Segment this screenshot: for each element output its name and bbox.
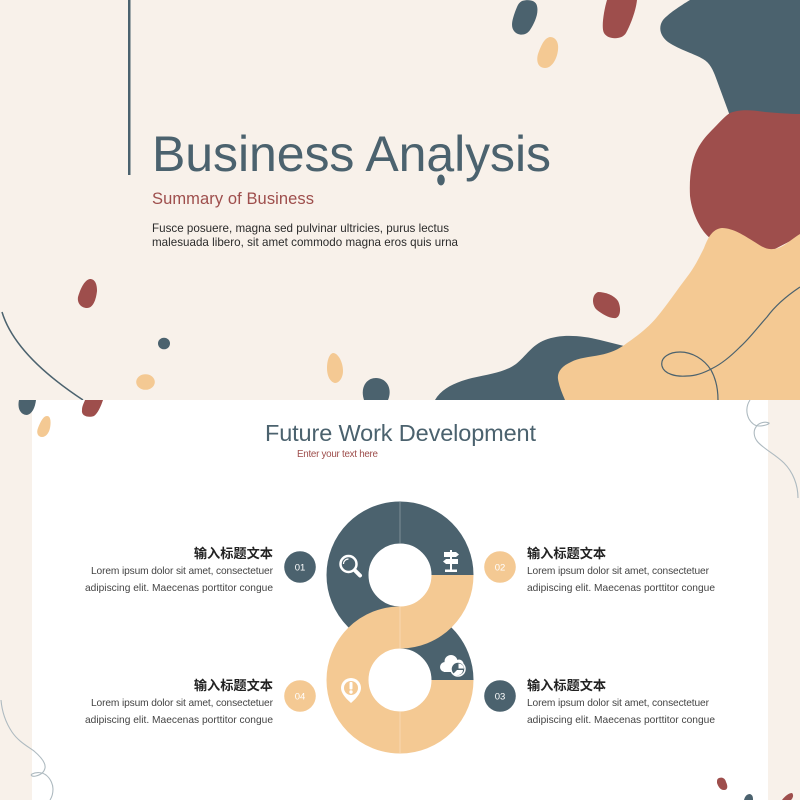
description 03: adipiscing elit. Maecenas porttitor congue (527, 715, 715, 726)
blob: red top (603, 0, 637, 38)
body text: Fusce posuere, magna sed pulvinar ultricies, purus lectus (152, 222, 449, 235)
heading 04: 输入标题文本 (194, 677, 273, 693)
badge 04: 04 (295, 692, 305, 702)
title: Business Analysis (152, 126, 551, 182)
heading: Future Work Development (265, 420, 536, 446)
blob: tan top left (37, 416, 51, 437)
blob: red bottom right (717, 778, 727, 790)
blob: dark top (512, 0, 537, 35)
panel: title slide (2, 0, 800, 400)
item 03 (484, 677, 715, 726)
blob: red right small (593, 292, 620, 318)
blob: tan middle (327, 353, 343, 383)
heading 03: 输入标题文本 (527, 677, 606, 693)
description 01: Lorem ipsum dolor sit amet, consectetuer (91, 566, 274, 577)
curve: left arc (2, 312, 83, 400)
badge 01: 01 (295, 562, 305, 574)
curve: line over tan blob (662, 287, 800, 400)
panel: white content slide (32, 400, 768, 800)
blob: large dark top right (660, 0, 800, 116)
description 04: adipiscing elit. Maecenas porttitor congue (85, 715, 273, 726)
blob: large red right (690, 110, 800, 250)
blob: dark semicircle bottom (363, 378, 390, 400)
badge 04 (284, 680, 316, 712)
heading 01: 输入标题文本 (194, 545, 273, 561)
badge 03 (484, 680, 516, 712)
blob: tan top (537, 37, 558, 68)
blob: dark lower wave (435, 336, 640, 400)
blob: dark clipped top left (18, 400, 36, 415)
description 03: Lorem ipsum dolor sit amet, consectetuer (527, 698, 710, 709)
blob: large tan lower right (558, 228, 800, 400)
item 02 (484, 545, 715, 594)
subtitle: Summary of Business (152, 190, 314, 208)
badge 01 (284, 551, 316, 583)
blob: dark dot left (158, 338, 170, 349)
heading 02: 输入标题文本 (527, 545, 606, 561)
segment: dark lower quadrant (400, 628, 452, 680)
description 01: adipiscing elit. Maecenas porttitor congue (85, 583, 273, 594)
curve: bottom left line (1, 700, 53, 800)
item 01 (85, 545, 316, 594)
curve: top right line (747, 400, 798, 498)
body text (152, 222, 459, 249)
blob: red corner bottom right (782, 793, 793, 800)
blob: dark bottom right (744, 794, 753, 800)
vertical rule (128, 0, 130, 175)
description 02: adipiscing elit. Maecenas porttitor congue (527, 583, 715, 594)
badge 02: 02 (495, 562, 505, 574)
chart: figure eight ribbon (340, 502, 465, 753)
body text: malesuada libero, sit amet commodo magna eros quis urna (152, 236, 459, 249)
icon: exclamation pin (341, 678, 361, 703)
item 04 (85, 677, 316, 726)
icon: magnifier (340, 556, 360, 576)
description 02 (527, 566, 715, 594)
badge 03: 03 (495, 692, 505, 702)
icon: signpost (443, 550, 459, 572)
description 02: Lorem ipsum dolor sit amet, consectetuer (527, 566, 710, 577)
description 04 (85, 698, 274, 726)
blob: red clipped top left (82, 400, 103, 417)
seams (399, 502, 401, 753)
icon: cloud with pie (440, 655, 465, 676)
description 03 (527, 698, 715, 726)
segment: dark top ring (348, 522, 452, 628)
segment: tan ribbon (348, 575, 453, 732)
description 04: Lorem ipsum dolor sit amet, consectetuer (91, 698, 274, 709)
badge 02 (484, 551, 516, 583)
blob: small dark near title (437, 174, 445, 186)
blob: tan left (136, 374, 155, 390)
subheading: Enter your text here (297, 449, 379, 460)
description 01 (85, 566, 274, 594)
blob: red left (78, 279, 97, 308)
